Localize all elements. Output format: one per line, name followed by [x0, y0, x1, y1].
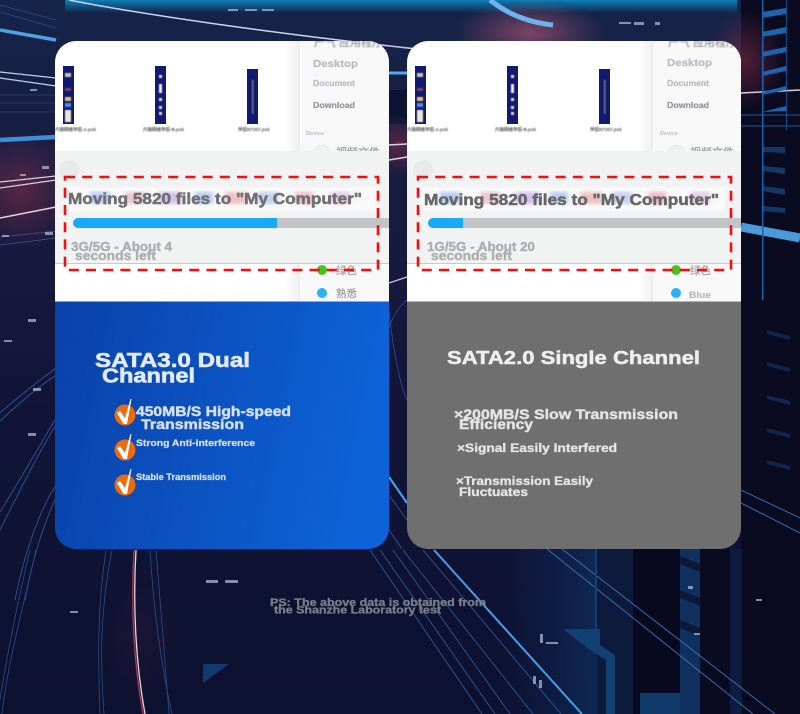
SATA2.0 heading: SATA2.0 Single Channel	[447, 347, 700, 368]
sidebar labels: Document	[313, 79, 355, 88]
sidebar labels: 产气 应用程序	[668, 35, 737, 49]
drawback: interference: ×Signal Easily Interfered	[457, 441, 617, 455]
time remaining: seconds left	[75, 249, 157, 263]
feature text: Stable Transmission	[136, 472, 226, 482]
dialog title: Moving 5820 files to "My Computer"	[68, 191, 362, 208]
footnote: PS: The above data is obtained from	[270, 597, 486, 609]
sidebar labels: Download	[313, 101, 355, 110]
file thumbnails	[407, 66, 622, 133]
sidebar labels: 视频文件	[336, 145, 380, 159]
colour labels: 绿色	[690, 264, 711, 277]
ladder structure	[762, 0, 790, 470]
sidebar labels	[660, 41, 734, 151]
sidebar labels: Document	[667, 79, 709, 88]
file thumbnails: 六施网络伴侣-B.psb	[495, 126, 536, 133]
time remaining	[427, 240, 535, 263]
feature text: 450MB/S High-speed	[136, 404, 291, 419]
feature text: Transmission	[141, 417, 244, 432]
colour labels	[317, 264, 357, 300]
file thumbnails: 六施网络伴侣-A.psb	[55, 126, 96, 133]
sidebar labels: Download	[667, 101, 709, 110]
colour labels: 绿色	[336, 264, 357, 277]
sidebar labels: 产气 应用程序	[314, 35, 383, 49]
SATA3.0 heading	[95, 349, 250, 388]
sidebar labels: 视频文件	[690, 145, 734, 159]
sidebar labels: Device	[306, 131, 324, 137]
file window	[407, 41, 741, 302]
sidebar labels: Desktop	[313, 58, 358, 70]
drawback: fluctuation: ×Transmission Easily	[456, 474, 593, 488]
progress bar	[428, 218, 758, 228]
icon: check	[114, 469, 136, 496]
file thumbnails: 伴侣NT257.psb	[238, 126, 270, 133]
feature: high speed	[114, 399, 291, 432]
drawback: slow transmission: Efficiency	[459, 417, 534, 432]
feature: anti-interference	[114, 434, 255, 460]
red dashed highlight	[418, 177, 731, 270]
building details	[203, 549, 700, 714]
copy dialog	[55, 151, 389, 264]
time remaining: 3G/5G - About 4	[71, 240, 172, 254]
sidebar labels: Desktop	[667, 57, 712, 69]
colour labels: Blue	[689, 290, 711, 300]
time remaining: 1G/5G - About 20	[427, 240, 535, 254]
drawback: fluctuation	[456, 474, 593, 499]
drawback: fluctuation: Fluctuates	[459, 485, 528, 499]
panel: SATA3.0 card	[55, 35, 403, 550]
time remaining	[71, 240, 172, 263]
sidebar labels: Device	[660, 131, 678, 137]
copy dialog	[407, 151, 741, 264]
file thumbnails: 伴侣NT257.psb	[590, 126, 622, 133]
file window	[55, 41, 389, 302]
drawback: slow transmission: ×200MB/S Slow Transmission	[454, 407, 678, 422]
dialog title: Moving 5820 files to "My Computer"	[424, 192, 719, 209]
red dashed highlight	[65, 177, 378, 270]
colour labels	[671, 264, 711, 300]
sidebar labels	[306, 41, 381, 151]
panel: SATA2.0 card	[407, 35, 758, 550]
feature text: Strong Anti-interference	[136, 438, 255, 448]
colour labels: 熟悉	[336, 287, 357, 300]
file thumbnails: 六施网络伴侣-B.psb	[143, 126, 184, 133]
icon: check	[114, 399, 136, 426]
SATA3.0 heading: Channel	[102, 364, 195, 388]
drawback: slow transmission	[454, 407, 678, 432]
file thumbnails: 六施网络伴侣-A.psb	[407, 126, 448, 133]
footnote: the Shanzhe Laboratory test	[274, 604, 442, 616]
blue spec panel	[55, 302, 389, 550]
feature: stable	[114, 469, 226, 496]
icon: check	[114, 434, 136, 460]
progress bar	[73, 218, 403, 228]
feature text	[136, 404, 291, 432]
footnote	[270, 597, 486, 616]
file thumbnails	[55, 66, 270, 133]
grey spec panel	[407, 302, 741, 550]
SATA3.0 heading: SATA3.0 Dual	[95, 349, 250, 372]
time remaining: seconds left	[431, 249, 513, 263]
